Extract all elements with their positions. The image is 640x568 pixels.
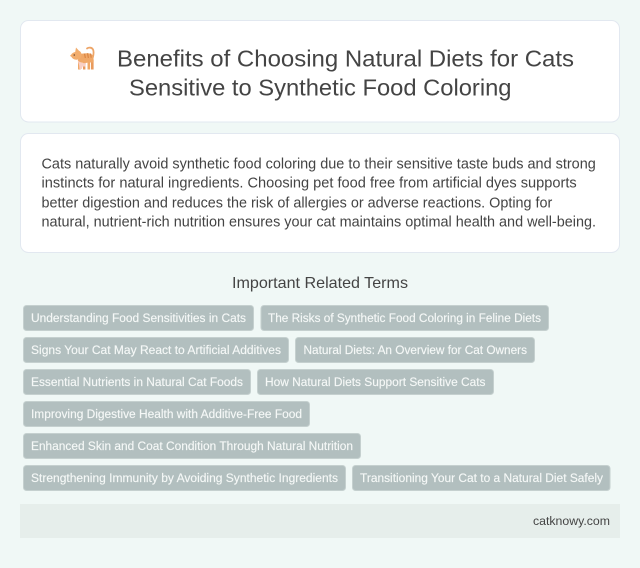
tag: Essential Nutrients in Natural Cat Foods	[31, 375, 243, 389]
panel: related term tags	[24, 306, 610, 490]
text block: intro paragraph: better digestion and reduces the risk of allergies or adverse reactions. Opting for	[42, 195, 552, 211]
tag: Understanding Food Sensitivities in Cats	[31, 311, 246, 325]
tag: Natural Diets: An Overview for Cat Owners	[304, 343, 527, 357]
tag: The Risks of Synthetic Food Coloring in Feline Diets	[268, 311, 541, 325]
text block: intro paragraph: Cats naturally avoid synthetic food coloring due to their sensitive taste buds and strong	[42, 156, 596, 172]
heading: related terms: Important Related Terms	[232, 275, 408, 292]
tag: Enhanced Skin and Coat Condition Through Natural Nutrition	[31, 439, 353, 453]
title	[117, 46, 574, 101]
text block: intro paragraph: natural, nutrient-rich nutrition ensures your cat maintains optimal health and well-being.	[42, 214, 596, 230]
tag	[258, 370, 494, 394]
tag: Strengthening Immunity by Avoiding Synthetic Ingredients	[31, 471, 338, 485]
title: Benefits of Choosing Natural Diets for Cats	[117, 46, 574, 72]
footer: catknowy.com	[533, 514, 610, 528]
tag: How Natural Diets Support Sensitive Cats	[265, 375, 486, 389]
tag	[24, 338, 288, 362]
tag: Improving Digestive Health with Additive-Free Food	[31, 407, 302, 421]
text block: intro paragraph	[42, 156, 596, 230]
tag	[24, 434, 360, 458]
panel: intro text	[20, 134, 620, 252]
tag: Signs Your Cat May React to Artificial Additives	[31, 343, 281, 357]
tag	[24, 466, 346, 490]
title: Sensitive to Synthetic Food Coloring	[129, 75, 512, 101]
icon: cat	[70, 48, 94, 70]
tag	[24, 370, 250, 394]
tag: Transitioning Your Cat to a Natural Diet Safely	[360, 471, 604, 485]
tag	[24, 402, 310, 426]
tag	[24, 306, 254, 330]
panel: header	[20, 20, 620, 122]
footer	[20, 504, 620, 538]
tag	[352, 466, 610, 490]
tag	[261, 306, 548, 330]
text block: intro paragraph: instincts for natural ingredients. Choosing pet food free from artificial dyes supports	[42, 175, 577, 191]
tag	[296, 338, 534, 362]
